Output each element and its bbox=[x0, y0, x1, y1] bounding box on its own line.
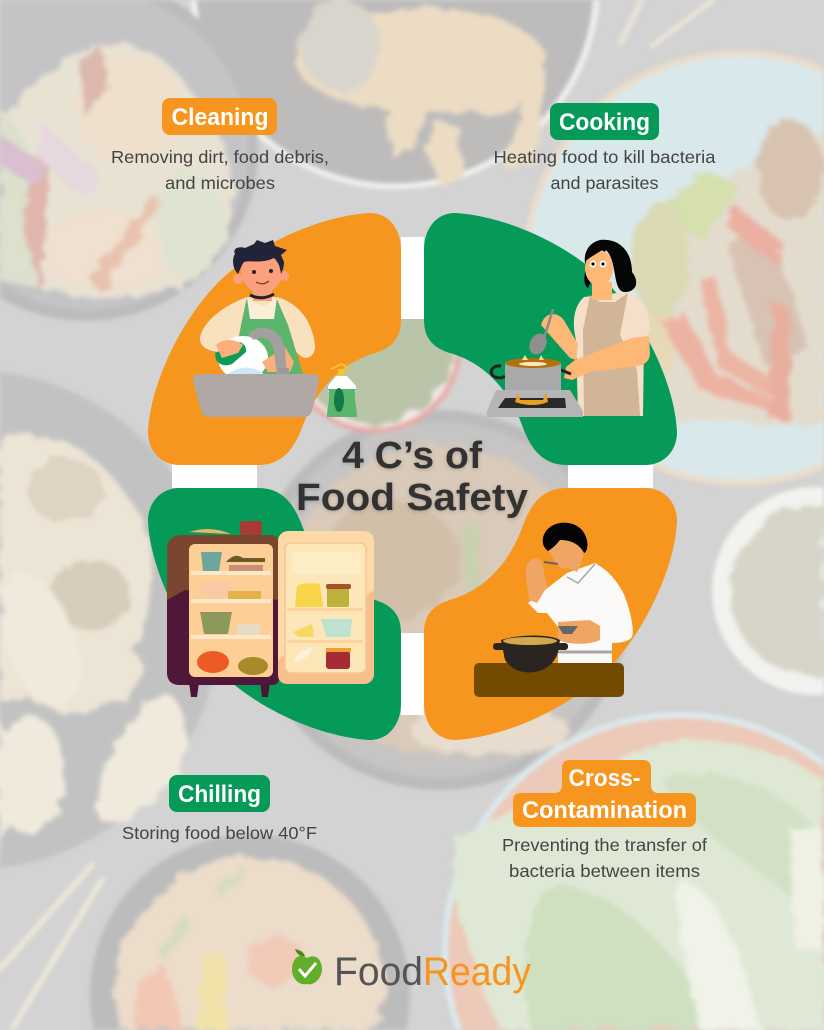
icon: chef tasting food bbox=[474, 523, 633, 697]
background: small bowl with pink rim bbox=[286, 257, 462, 433]
white square frame segments bbox=[172, 237, 653, 715]
background: top centre bowl bbox=[191, 0, 599, 189]
label: cooking bbox=[550, 103, 659, 140]
panel: chilling blob with illustration bbox=[148, 488, 401, 740]
text: cooking description bbox=[494, 147, 716, 193]
label: chilling: Chilling bbox=[178, 781, 261, 808]
icon: soap bottle bbox=[327, 364, 357, 417]
background: centre noodle bowl bbox=[250, 410, 630, 790]
background: right white bowl bbox=[712, 487, 824, 695]
icon: open refrigerator bbox=[167, 521, 374, 697]
panel: cleaning blob with illustration bbox=[148, 213, 401, 465]
logo: FoodReady: Ready bbox=[423, 950, 531, 994]
label: cooking: Cooking bbox=[559, 109, 650, 136]
text: chilling description: Storing food below 40°F bbox=[122, 823, 317, 843]
title bbox=[296, 435, 528, 519]
label: cross-contamination: Cross- bbox=[568, 765, 640, 792]
text: cleaning description: Removing dirt, food debris, bbox=[111, 147, 329, 167]
background: top right plate bbox=[522, 50, 824, 486]
background: chopsticks top right bbox=[620, 0, 713, 46]
text: cooking description: and parasites bbox=[550, 173, 659, 193]
panel: cross-contamination blob with illustration bbox=[424, 488, 677, 740]
text: cleaning description: and microbes bbox=[165, 173, 275, 193]
background: bottom right plate of greens bbox=[442, 712, 824, 1030]
background: top left salad bowl bbox=[0, 0, 258, 321]
background: bottom left chopsticks bbox=[0, 865, 102, 1027]
title: Food Safety bbox=[296, 477, 528, 519]
background: bottom rice bowl bbox=[90, 835, 410, 1030]
icon: woman cooking bbox=[487, 240, 650, 417]
logo: FoodReady bbox=[292, 949, 531, 994]
panel: cooking blob with illustration bbox=[424, 213, 677, 465]
text: cross-contamination description bbox=[502, 835, 707, 881]
title: 4 C’s of bbox=[342, 435, 482, 477]
label: cleaning bbox=[162, 98, 277, 135]
label: cross-contamination: Contamination bbox=[522, 797, 687, 824]
background: left dark bowl and dumplings bbox=[0, 372, 220, 868]
label: cleaning: Cleaning bbox=[172, 104, 268, 131]
text: cooking description: Heating food to kill bacteria bbox=[494, 147, 716, 167]
logo: FoodReady: Food bbox=[334, 950, 423, 994]
label: chilling bbox=[169, 775, 270, 812]
icon: green apple with check bbox=[292, 949, 322, 984]
text: cleaning description bbox=[111, 147, 329, 193]
label: cross-contamination bbox=[513, 760, 696, 827]
text: cross-contamination description: bacteria between items bbox=[509, 861, 700, 881]
icon: man washing dishes bbox=[193, 240, 357, 417]
text: cross-contamination description: Preventing the transfer of bbox=[502, 835, 707, 855]
